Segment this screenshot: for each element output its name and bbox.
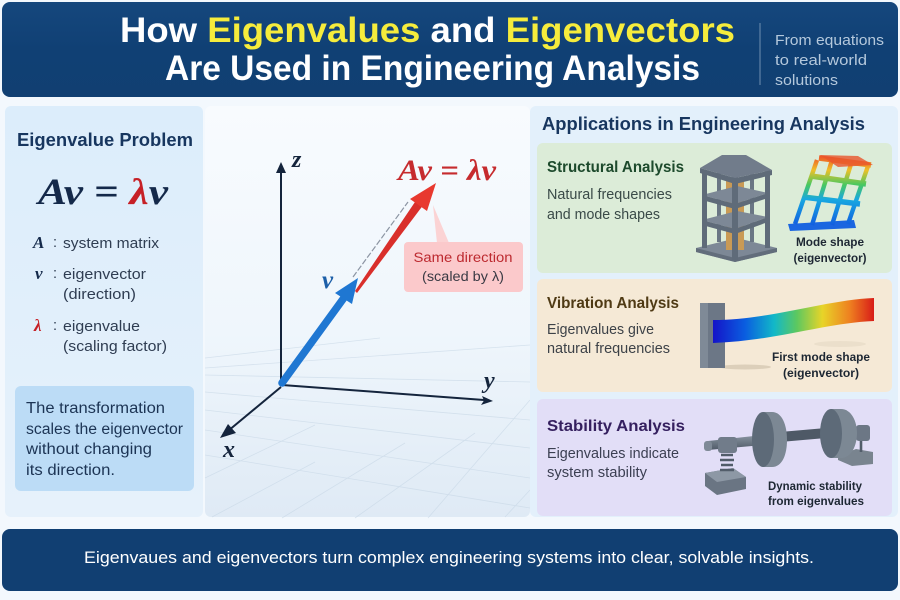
- caption: [794, 235, 866, 265]
- footer banner: [2, 529, 898, 591]
- panel: applications: [530, 106, 898, 517]
- icon: rotor on springs: [704, 409, 873, 495]
- title: Are Used in Engineering Analysis: [165, 49, 700, 88]
- card: vibration analysis: Vibration Analysis: [547, 295, 679, 312]
- footer banner: Eigenvaues and eigenvectors turn complex engineering systems into clear, solvable insights.: [84, 548, 814, 567]
- caption: (eigenvector): [783, 366, 859, 380]
- equation label: Av = λv: [396, 154, 497, 187]
- callout: transformation note: [15, 386, 194, 491]
- card: stability analysis: Eigenvalues indicate: [547, 446, 679, 462]
- header banner: [2, 2, 898, 97]
- subtitle: From equations: [775, 32, 884, 49]
- card: structural analysis: [537, 143, 892, 273]
- panel: eigenvalue problem: [5, 106, 203, 517]
- definition: v: v: [35, 264, 43, 283]
- definition: A: [32, 233, 160, 252]
- caption: Dynamic stability: [768, 479, 862, 493]
- definition: v: :: [53, 266, 57, 282]
- card: structural analysis: Natural frequencies: [547, 187, 672, 203]
- definition: lambda: [33, 316, 167, 355]
- callout: same direction: Same direction: [414, 250, 512, 265]
- definition: v: [35, 264, 146, 303]
- axis labels: z: [291, 147, 302, 173]
- card: structural analysis: Structural Analysis: [547, 159, 684, 176]
- callout: same direction: (scaled by λ): [422, 269, 504, 284]
- card: vibration analysis: [537, 279, 892, 392]
- callout: transformation note: its direction.: [26, 462, 115, 479]
- definition: v: eigenvector: [63, 267, 146, 283]
- panel heading: Eigenvalue Problem: [17, 130, 193, 150]
- axes: [220, 147, 495, 463]
- icon: cantilever beam: [700, 298, 874, 370]
- card: stability analysis: system stability: [547, 465, 648, 481]
- definition: lambda: :: [53, 318, 57, 334]
- axes: y: [481, 368, 495, 394]
- vector label v: v: [322, 267, 334, 294]
- definition: A: A: [32, 233, 44, 252]
- icon: colored mode shape: [788, 155, 873, 231]
- caption: [772, 350, 870, 380]
- definition: lambda: eigenvalue: [63, 319, 140, 335]
- card: stability analysis: [537, 399, 892, 516]
- subtitle: [775, 32, 884, 89]
- caption: [768, 479, 864, 508]
- subtitle: solutions: [775, 72, 838, 89]
- definition: lambda: λ: [33, 316, 42, 335]
- card: structural analysis: and mode shapes: [547, 207, 660, 223]
- callout: transformation note: The transformation: [26, 400, 165, 417]
- dashed reference line: [353, 202, 408, 277]
- blue eigenvector: [282, 295, 346, 383]
- caption: First mode shape: [772, 350, 870, 364]
- callout: transformation note: without changing: [25, 441, 152, 458]
- caption: Mode shape: [796, 235, 864, 249]
- subtitle: to real-world: [775, 52, 867, 69]
- caption: (eigenvector): [794, 251, 866, 265]
- callout: same direction: [404, 205, 523, 292]
- title: [120, 11, 735, 88]
- main equation: Av = λv: [36, 172, 169, 213]
- axes: x: [222, 437, 235, 463]
- red scaled vector: [355, 199, 424, 293]
- panel: 3D vector diagram: [205, 106, 530, 518]
- card: vibration analysis: Eigenvalues give: [547, 322, 654, 338]
- definition: A: system matrix: [63, 236, 160, 252]
- definition: lambda: (scaling factor): [63, 339, 167, 355]
- title: How Eigenvalues and Eigenvectors: [120, 11, 735, 50]
- disc two: [820, 409, 857, 458]
- caption: from eigenvalues: [768, 494, 864, 508]
- definition: A: :: [53, 235, 57, 251]
- panel heading: Applications in Engineering Analysis: [542, 113, 865, 134]
- card: stability analysis: Stability Analysis: [547, 418, 685, 435]
- callout: transformation note: scales the eigenvector: [26, 421, 183, 438]
- disc one: [752, 412, 787, 467]
- definition: v: (direction): [63, 287, 136, 303]
- icon: gray building: [696, 155, 777, 262]
- card: vibration analysis: natural frequencies: [547, 341, 670, 357]
